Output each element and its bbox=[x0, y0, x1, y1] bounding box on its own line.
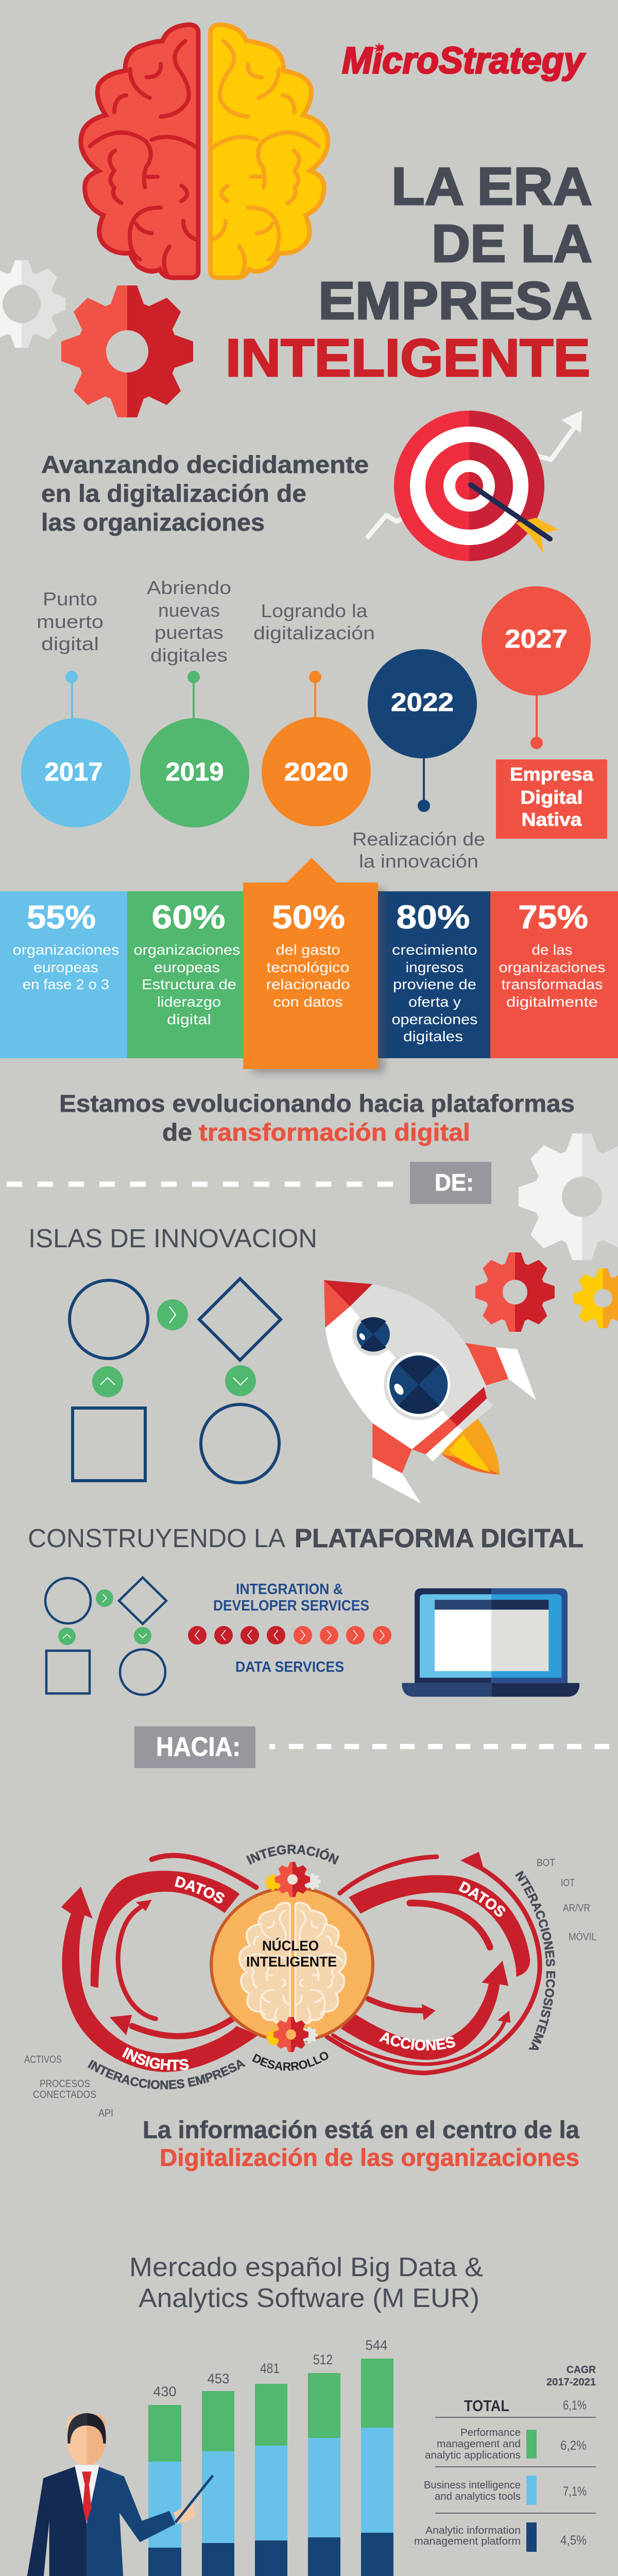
figure: presenter man bbox=[26, 2413, 213, 2576]
stat: 60%: liderazgo bbox=[157, 994, 221, 1010]
diagram: small shapes bbox=[45, 1578, 166, 1695]
bottom gears bbox=[266, 2017, 318, 2052]
totals: 430 bbox=[153, 2384, 176, 2399]
chart legend with CAGR: management platform bbox=[414, 2536, 521, 2547]
chart legend with CAGR: 6,1% bbox=[563, 2398, 587, 2413]
heading: avanzando bbox=[41, 451, 369, 536]
milestone: 2019: puertas bbox=[154, 622, 224, 643]
chart legend with CAGR: Business intelligence bbox=[424, 2480, 521, 2491]
chart legend with CAGR: and analytics tools bbox=[435, 2491, 521, 2502]
milestone: 2022: Realización de bbox=[352, 828, 485, 850]
milestone: 2022 bbox=[352, 649, 485, 872]
heading: construyendo la plataforma digital: PLATAFORMA DIGITAL bbox=[295, 1523, 583, 1553]
chart legend with CAGR: Analytic information bbox=[425, 2525, 521, 2536]
curved labels: INTERACCIONES EMPRESA bbox=[88, 2060, 246, 2090]
chart legend with CAGR: TOTAL bbox=[464, 2397, 509, 2415]
stacked bar chart bbox=[148, 2337, 393, 2576]
totals bbox=[153, 2337, 387, 2399]
ecosystem labels: MÓVIL bbox=[569, 1931, 596, 1943]
chart legend with CAGR bbox=[414, 2364, 596, 2552]
heading: mercado espanol: Mercado español Big Data & bbox=[129, 2252, 483, 2282]
icon: rocket bbox=[324, 1280, 536, 1503]
enterprise labels: PROCESOS bbox=[40, 2078, 90, 2090]
milestone: 2017: Punto bbox=[43, 588, 97, 609]
core label: INTELIGENTE bbox=[246, 1954, 337, 1970]
heading: avanzando: Avanzando decididamente bbox=[41, 451, 369, 478]
label: integration services bbox=[213, 1581, 369, 1614]
stat: 50%: tecnológico bbox=[267, 959, 349, 975]
chart legend with CAGR: management and bbox=[437, 2438, 521, 2450]
heading: evolucionando: transformación digital bbox=[199, 1118, 470, 1146]
stat: 55% bbox=[12, 899, 119, 992]
milestone: 2019: digitales bbox=[150, 645, 228, 666]
milestone: 2017: 2017 bbox=[44, 757, 103, 786]
stat: 60% bbox=[134, 899, 240, 1027]
stat: 80%: proviene de bbox=[393, 976, 476, 992]
ecosystem labels: BOT bbox=[537, 1857, 555, 1869]
stat: 60%: Estructura de bbox=[142, 976, 236, 992]
totals: 481 bbox=[260, 2361, 280, 2376]
milestone: 2019: Abriendo bbox=[147, 577, 231, 598]
milestone: 2020: 2020 bbox=[284, 757, 348, 786]
stats band bbox=[0, 858, 618, 1073]
ecosystem labels bbox=[537, 1857, 596, 1943]
stat: 50%: 50% bbox=[272, 899, 345, 936]
chart legend with CAGR: 4,5% bbox=[560, 2533, 587, 2548]
connector dots bbox=[188, 1626, 391, 1645]
curved labels: DATOS bbox=[458, 1881, 506, 1917]
bars bbox=[148, 2359, 393, 2576]
title: DE LA bbox=[432, 214, 592, 273]
chart legend with CAGR: analytic applications bbox=[425, 2450, 521, 2461]
logo: MicroStrategy: MicroStrategy bbox=[342, 40, 586, 81]
heading: avanzando: en la digitalización de bbox=[41, 480, 306, 507]
stat: 60%: digital bbox=[167, 1011, 211, 1027]
heading: avanzando: las organizaciones bbox=[41, 509, 265, 536]
heading: evolucionando: de bbox=[162, 1118, 192, 1146]
milestone: 2017: digital bbox=[41, 633, 99, 654]
milestone: 2027: Nativa bbox=[521, 809, 582, 830]
milestone: 2022: 2022 bbox=[391, 688, 454, 717]
stat: 80%: operaciones bbox=[391, 1011, 478, 1027]
milestone: 2017: muerto bbox=[37, 611, 104, 632]
title: EMPRESA bbox=[318, 271, 592, 330]
milestone: 2020 bbox=[253, 600, 375, 826]
tag: DE bbox=[410, 1162, 491, 1204]
stat: 55%: europeas bbox=[33, 959, 98, 975]
milestone: 2027: Digital bbox=[520, 787, 583, 808]
stat: 80% bbox=[391, 899, 478, 1044]
stat: 80%: crecimiento bbox=[392, 942, 477, 958]
stat: 60%: europeas bbox=[154, 959, 220, 975]
stat: 80%: digitales bbox=[403, 1028, 463, 1044]
stat: 60%: 60% bbox=[151, 899, 226, 936]
ecosystem labels: AR/VR bbox=[563, 1903, 590, 1914]
chart legend with CAGR: 2017-2021 bbox=[546, 2377, 596, 2388]
milestone: 2022: la innovación bbox=[359, 851, 478, 872]
stat: 50%: del gasto bbox=[276, 942, 340, 958]
heading: informacion en el centro: Digitalización de las organizaciones bbox=[160, 2144, 579, 2171]
icon: laptop bbox=[402, 1588, 579, 1697]
diagram: infinity loop with intelligent core bbox=[24, 1844, 596, 2119]
ecosystem labels: IOT bbox=[561, 1877, 575, 1889]
icon: brain bbox=[81, 25, 328, 278]
icon: red gear small bbox=[475, 1252, 555, 1332]
title: LA ERA bbox=[391, 157, 592, 216]
stat: 75%: de las bbox=[531, 942, 573, 958]
icon: big white gear bbox=[519, 1133, 618, 1260]
milestone: 2027: Empresa bbox=[510, 764, 594, 785]
stat: 55%: en fase 2 o 3 bbox=[23, 976, 109, 992]
milestone: 2020: digitalización bbox=[253, 622, 375, 643]
timeline bbox=[21, 577, 607, 872]
chart legend with CAGR: Performance bbox=[460, 2427, 521, 2438]
milestone: 2027 bbox=[482, 586, 607, 839]
stat: 75%: transformadas bbox=[502, 976, 603, 992]
milestone: 2017 bbox=[21, 588, 130, 827]
curved labels: DATOS bbox=[175, 1876, 225, 1903]
enterprise labels: API bbox=[98, 2108, 113, 2119]
stat: 80%: oferta y bbox=[408, 994, 461, 1010]
chart legend with CAGR: 6,2% bbox=[560, 2438, 587, 2453]
stat: 75%: 75% bbox=[518, 899, 588, 936]
milestone: 2019 bbox=[140, 577, 249, 827]
heading: informacion en el centro: La información está en el centro de la bbox=[143, 2116, 580, 2143]
milestone: 2020: Logrando la bbox=[261, 600, 368, 621]
core label: NÚCLEO bbox=[262, 1938, 319, 1954]
red loop arrows bbox=[61, 1852, 540, 2073]
stat: 55%: 55% bbox=[27, 899, 96, 936]
icon: white gear bbox=[0, 260, 65, 348]
heading: mercado espanol bbox=[129, 2252, 483, 2313]
icon: yellow gear bbox=[573, 1268, 618, 1328]
stat: 75%: organizaciones bbox=[499, 959, 606, 975]
stat: 80%: ingresos bbox=[406, 959, 464, 975]
stat: 80%: 80% bbox=[397, 899, 470, 936]
top gears bbox=[265, 1862, 321, 1897]
heading: construyendo la plataforma digital: CONSTRUYENDO LA bbox=[28, 1523, 285, 1553]
totals: 453 bbox=[207, 2371, 230, 2386]
stat: 75% bbox=[499, 899, 606, 1010]
title bbox=[226, 157, 592, 387]
stat: 50% bbox=[266, 899, 350, 1010]
curved labels: INSIGHTS bbox=[122, 2047, 189, 2071]
curved labels bbox=[88, 1844, 555, 2090]
milestone: 2019: 2019 bbox=[166, 757, 224, 786]
totals: 512 bbox=[313, 2352, 333, 2367]
tag: HACIA bbox=[134, 1726, 255, 1768]
label: integration services: INTEGRATION & bbox=[236, 1581, 343, 1598]
heading: construyendo la plataforma digital bbox=[28, 1523, 583, 1553]
curved labels: ACCIONES bbox=[379, 2032, 455, 2050]
stat: 75%: digitalmente bbox=[506, 994, 598, 1010]
tag: HACIA: HACIA: bbox=[156, 1732, 241, 1762]
curved labels: INTERACCIONES ECOSISTEMA bbox=[515, 1870, 555, 2050]
tag: DE: DE: bbox=[435, 1169, 474, 1196]
enterprise labels: CONECTADOS bbox=[33, 2089, 96, 2100]
heading: evolucionando: Estamos evolucionando hacia plataformas bbox=[59, 1090, 575, 1117]
heading: informacion en el centro bbox=[143, 2116, 580, 2171]
icon: red gear bbox=[61, 285, 193, 417]
title: INTELIGENTE bbox=[226, 328, 590, 387]
stat: 55%: organizaciones bbox=[12, 942, 119, 958]
milestone: 2019: nuevas bbox=[158, 600, 220, 621]
stat: 50%: relacionado bbox=[266, 976, 350, 992]
heading: mercado espanol: Analytics Software (M EUR) bbox=[139, 2283, 479, 2313]
milestone: 2027: 2027 bbox=[505, 624, 568, 653]
label: data services: DATA SERVICES bbox=[235, 1659, 344, 1675]
enterprise labels bbox=[24, 2054, 113, 2119]
enterprise labels: ACTIVOS bbox=[24, 2054, 62, 2065]
curved labels: DESARROLLO bbox=[252, 2052, 329, 2071]
chart legend with CAGR: CAGR bbox=[566, 2364, 596, 2376]
totals: 544 bbox=[366, 2337, 387, 2353]
stat: 60%: organizaciones bbox=[134, 942, 240, 958]
heading: evolucionando bbox=[59, 1090, 575, 1146]
chart legend with CAGR: 7,1% bbox=[563, 2484, 587, 2499]
label: integration services: DEVELOPER SERVICES bbox=[213, 1598, 369, 1614]
curved labels: INTEGRACIÓN bbox=[246, 1844, 339, 1865]
diagram: isolated shapes bbox=[70, 1279, 281, 1483]
heading: islas de innovacion: ISLAS DE INNOVACION bbox=[28, 1224, 317, 1253]
icon: target with dart and arrow bbox=[367, 411, 582, 561]
core label bbox=[246, 1938, 337, 1970]
stat: 50%: con datos bbox=[273, 994, 343, 1010]
